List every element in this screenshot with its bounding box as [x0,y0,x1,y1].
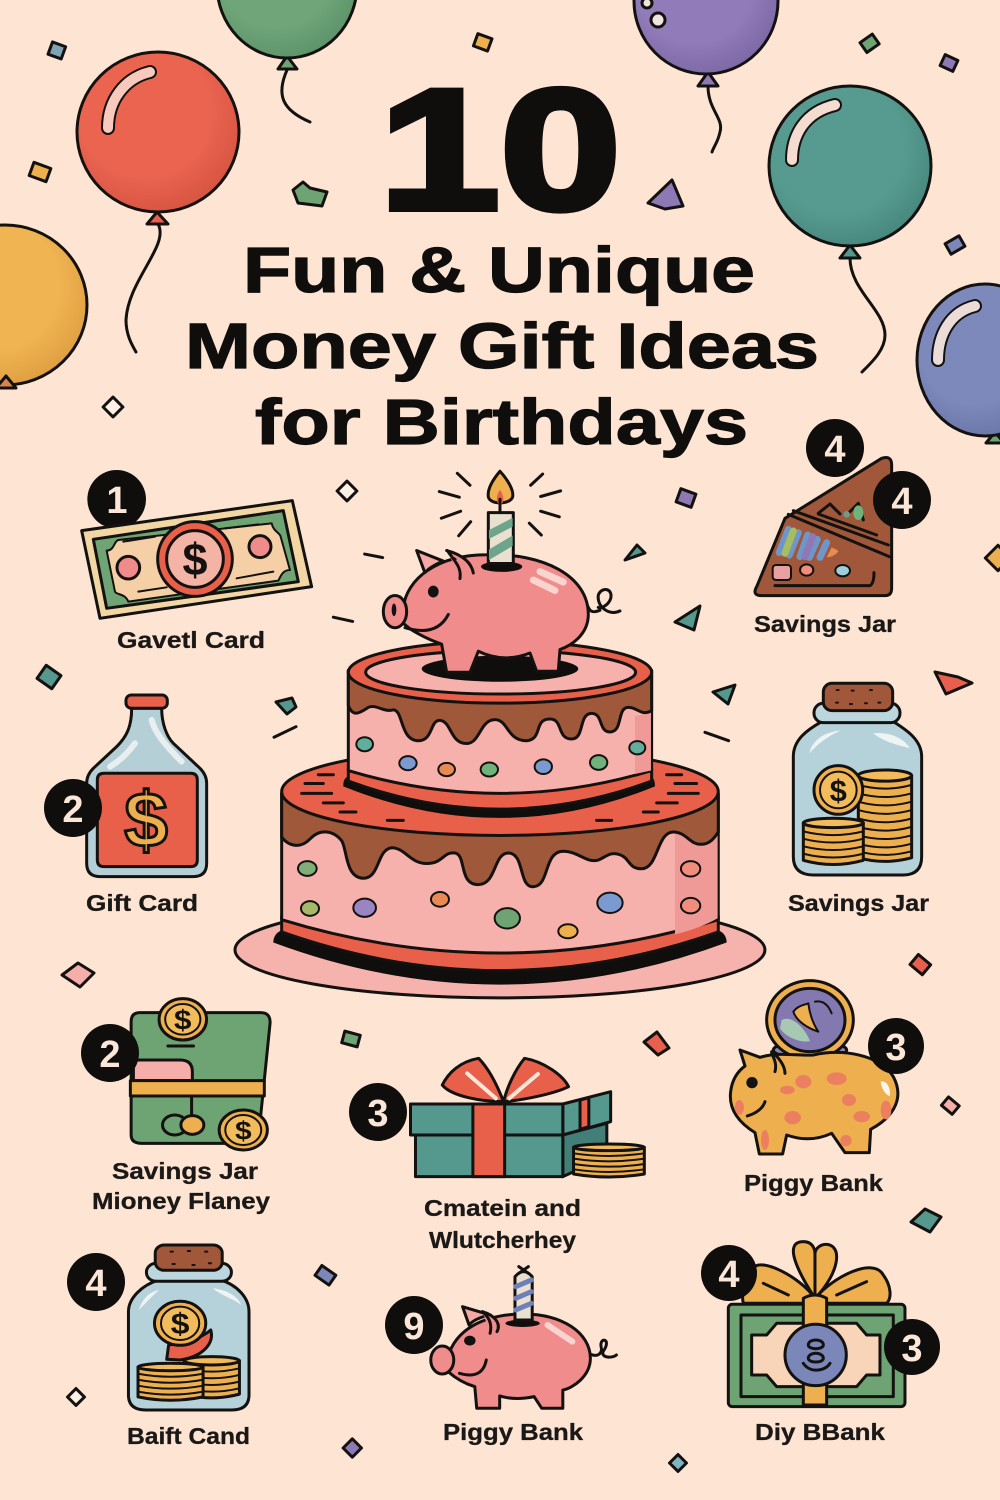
title line 2: Money Gift Ideas [185,310,819,382]
item: pink piggy bank [431,1267,616,1408]
front coin [814,766,863,814]
cork [155,1245,222,1270]
label: Mioney Flaney: Mioney Flaney [92,1188,270,1214]
pig ear [772,1052,785,1073]
item: savings jar with coins [793,683,922,875]
balloon: yellow [0,225,87,388]
coin [154,1301,206,1345]
pig eye [746,1077,758,1088]
badge 1 [87,470,146,529]
blue medallion [785,1324,846,1386]
small coin stack [803,818,863,864]
badge number 3 pig: 3 [885,1027,907,1069]
item: small jar with coins [128,1245,249,1410]
bottle cap [126,695,167,708]
candle [515,1272,532,1320]
box base [415,1135,563,1177]
mini decorations [818,503,877,535]
jar rim [146,1263,231,1281]
label: Gavetl Card: Gavetl Card [117,627,265,653]
piggy bank on cake [383,551,620,672]
balloon: teal [769,86,931,372]
pig smile [747,1102,765,1116]
title number 10: 10 [379,54,621,246]
badge 3 bill [884,1319,940,1375]
label: Savings Jar top right: Savings Jar [754,611,896,637]
badge number 2: 2 [62,789,84,831]
snout [431,1346,454,1374]
badge 4 bow [701,1245,757,1301]
bottle label [97,773,197,867]
label: Savings Jar right: Savings Jar [788,890,929,916]
title line 1: Fun & Unique [243,234,755,306]
balloon: green [217,0,357,122]
eye [464,1336,476,1346]
label: Wlutcherhey: Wlutcherhey [429,1227,576,1253]
badge 4 right [873,471,931,529]
item: yellow piggy bank [730,981,898,1154]
item: bottle [87,695,207,877]
label: Savings Jar wallet: Savings Jar [112,1158,258,1184]
badge number 4 right: 4 [891,481,913,523]
badge number 9: 9 [403,1306,425,1348]
label: Baift Cand: Baift Cand [127,1423,250,1449]
badge number 3 bill: 3 [901,1328,923,1370]
label: Gift Card: Gift Card [86,890,198,916]
box side [563,1123,607,1177]
item: gift box [411,1058,644,1177]
green banknote [728,1304,905,1407]
bottle highlight [110,720,182,767]
pig body [730,1050,898,1154]
label: Piggy Bank pink: Piggy Bank [443,1419,583,1445]
pink card [133,1060,192,1081]
coin: $ [171,1307,190,1340]
red gift [167,1330,211,1360]
sparkle and motion lines [274,473,729,741]
vertical ribbon [803,1295,827,1405]
balloon: purple [634,0,778,152]
cream panel [752,1323,880,1387]
slice body [755,457,892,596]
badge 4 jar [67,1253,125,1311]
item: money gift with bow [728,1242,905,1407]
ear [463,1307,490,1325]
tail [589,1340,616,1357]
badge number 3 gift: 3 [367,1093,389,1135]
rainbow stripes [779,529,827,557]
badge 4 top [806,419,864,477]
badge number 4 jar: 4 [85,1263,107,1305]
cork [823,683,893,711]
pig spots [735,1072,891,1150]
big coin stack [858,770,912,861]
slice divider [788,511,889,557]
item: cake slice [755,457,892,596]
wallet body [131,1013,270,1143]
badge 2 wallet [81,1024,139,1082]
bow [743,1265,890,1303]
coin stack back [184,1357,239,1398]
banknote: $ [182,534,208,585]
badge 9 [385,1296,443,1354]
top coin [159,999,207,1040]
badge 2 [44,779,102,837]
pig body [448,1314,590,1408]
item: wallet [130,999,270,1150]
item: banknote [82,470,312,618]
top coin: $ [174,1005,192,1036]
label: Diy BBank: Diy BBank [755,1419,885,1445]
badge 3 pig [868,1018,924,1074]
ear front [482,1312,498,1333]
coin stack front [138,1363,203,1400]
box lid side [563,1092,611,1135]
label: Cmatein and: Cmatein and [424,1195,581,1221]
candle with flame [488,471,513,564]
badge number 1: 1 [106,480,128,522]
central cake with piggy bank [235,471,765,998]
balloon: blue [917,284,1000,443]
box lid [411,1104,563,1135]
front coin: $ [830,774,847,808]
title line 3: for Birthdays [255,386,748,458]
badge number 4 bow: 4 [718,1254,740,1296]
dollar sign: $ [124,776,168,864]
jar highlights [809,731,910,753]
highlight [548,1325,572,1342]
pig highlight [881,1081,890,1096]
highlights [139,1288,241,1310]
bottle body [87,708,207,877]
badge 3 gift [349,1083,407,1141]
coin above pig [767,981,853,1067]
badge number 4 top: 4 [824,429,846,471]
jar body [128,1280,249,1410]
label: Piggy Bank yellow: Piggy Bank [744,1170,883,1196]
banknote [82,501,312,618]
smile [459,1360,486,1375]
badge number 2 wallet: 2 [99,1034,121,1076]
jar body [793,722,922,875]
title [185,54,819,458]
cake plate [235,902,765,998]
jar rim [814,703,900,723]
coin slot [505,1320,540,1327]
lower tier [273,748,727,985]
yellow strap [130,1081,264,1096]
clasp [168,1046,194,1117]
coin pile [574,1144,644,1177]
bow [442,1058,569,1102]
bottom coin: $ [235,1116,252,1145]
balloon: red [77,52,239,352]
upper tier [343,641,655,818]
bottom coin [219,1110,267,1150]
ribbon [473,1098,589,1177]
